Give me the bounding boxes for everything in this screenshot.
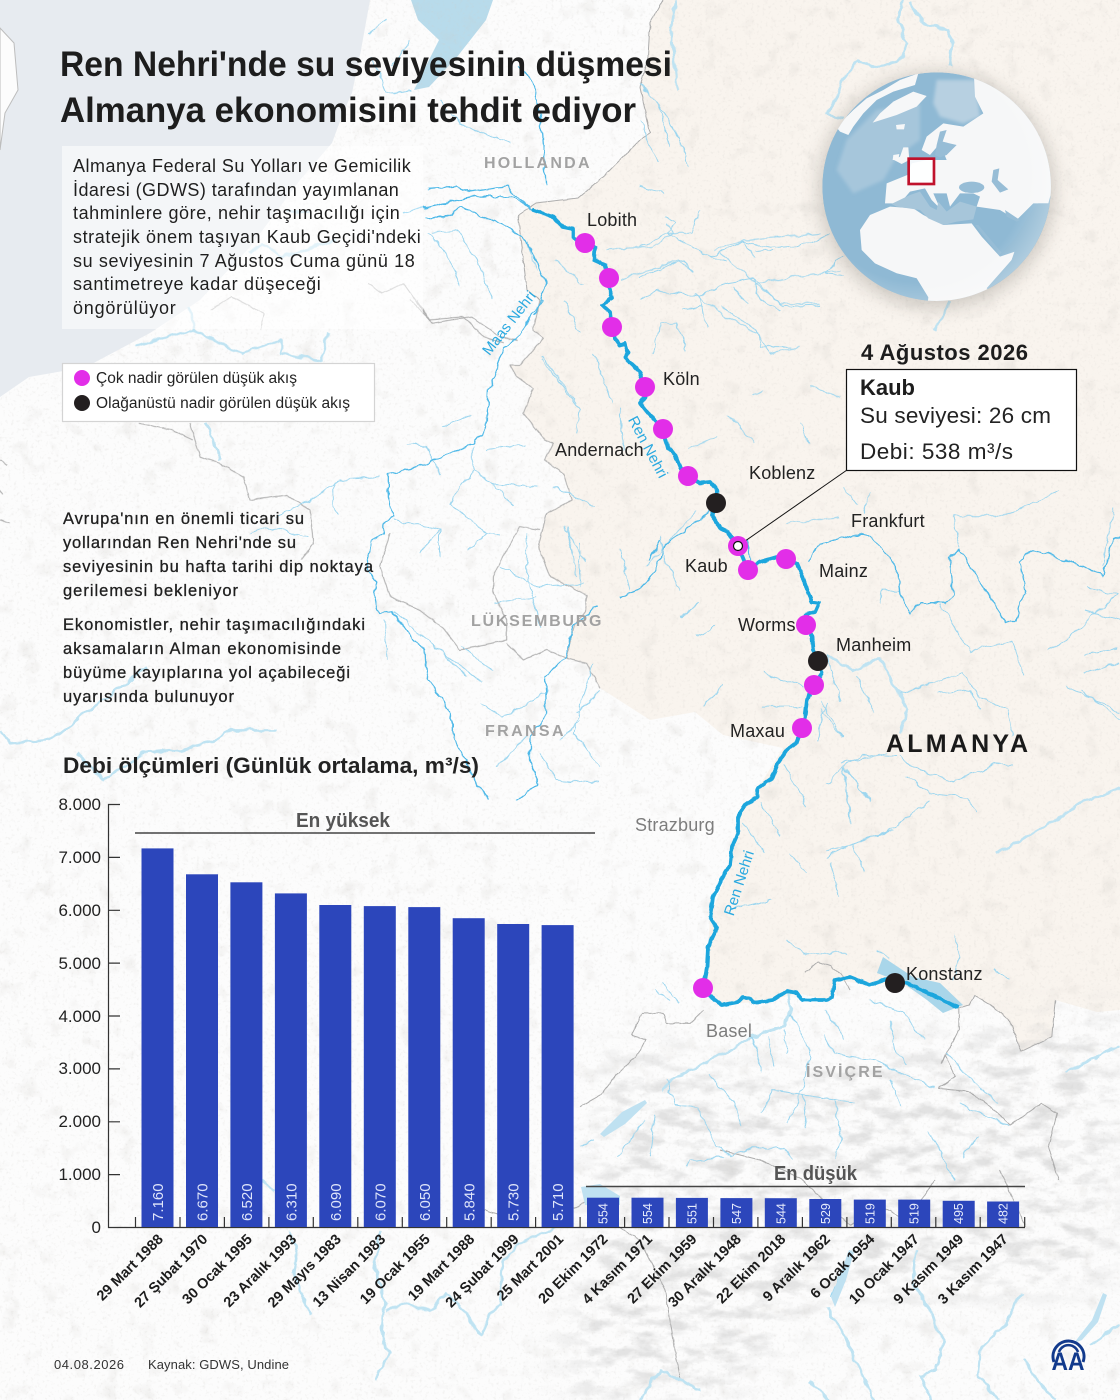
date labels: 27 Ekim 1959	[625, 1232, 700, 1307]
title: Ren Nehri'nde su seviyesinin düşmesi	[60, 45, 672, 84]
highest flow values: 5.710	[550, 1183, 567, 1221]
footer date and source: 04.08.2026	[54, 1357, 124, 1372]
lowest flow values: 519	[863, 1203, 877, 1224]
lakes	[581, 957, 1107, 1343]
river labels: Ren Nehri	[624, 413, 671, 481]
city labels: Konstanz	[906, 964, 983, 984]
city labels: Manheim	[836, 635, 911, 655]
date labels: 30 Ocak 1995	[180, 1232, 256, 1308]
date labels: 30 Aralık 1948	[665, 1232, 745, 1311]
group header: highest: En yüksek	[296, 810, 391, 832]
highest flow values: 6.310	[283, 1183, 300, 1221]
intro text panel: İdaresi (GDWS) tarafından yayımlanan	[73, 180, 399, 200]
city labels: Mainz	[819, 561, 868, 581]
date labels: 9 Kasım 1949	[891, 1232, 967, 1308]
country labels: İSVİÇRE	[806, 1063, 885, 1081]
callout: Kaub: Kaub	[860, 375, 915, 400]
intro text panel: öngörülüyor	[73, 298, 176, 318]
footer date and source	[54, 1357, 289, 1372]
highest flow values: 5.730	[506, 1183, 523, 1221]
lowest flow values: 482	[997, 1203, 1011, 1224]
y axis: 4.000	[58, 1007, 101, 1026]
Britain coast	[0, 28, 18, 150]
date labels: 19 Ocak 1955	[357, 1232, 434, 1308]
measurement stations: rare low flow	[575, 233, 824, 998]
date labels: 29 Mart 1988	[94, 1232, 167, 1304]
country labels: LÜKSEMBURG	[471, 611, 604, 630]
highest flow values: 6.520	[239, 1183, 256, 1221]
legend	[62, 364, 374, 422]
date labels: 25 Mart 2001	[494, 1232, 567, 1304]
city labels: Andernach	[555, 440, 644, 460]
y axis: 5.000	[58, 954, 101, 973]
highest flow values: 6.050	[417, 1183, 434, 1221]
date labels: 22 Ekim 2018	[714, 1232, 789, 1307]
date labels: 20 Ekim 1972	[536, 1232, 611, 1307]
y axis	[58, 795, 1025, 1237]
city labels: Basel	[706, 1021, 752, 1041]
y axis: 8.000	[58, 795, 101, 814]
country labels	[471, 155, 1028, 1081]
lowest flow values	[596, 1203, 1011, 1224]
intro text panel	[62, 146, 423, 329]
legend: Olağanüstü nadir görülen düşük akış	[96, 395, 350, 412]
date labels: 29 Mayıs 1983	[265, 1232, 345, 1311]
group header: lowest: En düşük	[774, 1163, 858, 1185]
highest flow values: 5.840	[461, 1183, 478, 1221]
date labels: 10 Ocak 1947	[846, 1232, 923, 1308]
lowest flow values: 529	[819, 1203, 833, 1224]
lowest flow values: 519	[908, 1203, 922, 1224]
highest flow values	[150, 1183, 567, 1221]
sea	[0, 0, 370, 397]
paragraph two: büyüme kayıplarına yol açabileceği	[63, 664, 350, 682]
highest flow values: 6.670	[194, 1183, 212, 1221]
date labels: 19 Mart 1988	[405, 1232, 478, 1304]
city labels: Lobith	[587, 210, 637, 230]
intro text panel: tahminlere göre, nehir taşımacılığı için	[73, 203, 400, 223]
locator globe	[818, 72, 1060, 313]
river labels	[479, 288, 758, 918]
date labels: 4 Kasım 1971	[580, 1232, 656, 1308]
intro text panel: stratejik önem taşıyan Kaub Geçidi'ndeki	[73, 227, 421, 247]
intro text panel: santimetreye kadar düşeceği	[73, 274, 321, 294]
city labels: Worms	[738, 615, 796, 635]
measurement stations: exceptionally rare low flow	[706, 493, 905, 993]
lowest flow values: 551	[685, 1203, 699, 1224]
bar chart	[58, 795, 1025, 1311]
highest flow bars	[142, 848, 574, 1227]
callout: Kaub: 4 Ağustos 2026	[861, 340, 1028, 365]
title	[60, 45, 672, 130]
IJsselmeer	[411, 0, 493, 90]
date labels: 24 Şubat 1999	[443, 1232, 523, 1311]
date labels: 6 Ocak 1954	[808, 1232, 878, 1302]
stronger rivers: Main, Maas, Mosel, Netherlands branches	[367, 67, 1120, 800]
paragraph one	[63, 510, 374, 600]
y axis: 6.000	[58, 901, 101, 920]
paragraph one: gerilemesi bekleniyor	[63, 582, 238, 600]
Germany land area	[510, 0, 1120, 1052]
paragraph one: Avrupa'nın en önemli ticari su	[63, 510, 304, 528]
y axis: 2.000	[58, 1112, 101, 1131]
lowest flow values: 547	[730, 1203, 744, 1224]
callout: Kaub	[846, 340, 1076, 470]
lowest flow bars	[587, 1198, 1019, 1227]
footer date and source: Kaynak: GDWS, Undine	[148, 1357, 289, 1372]
intro text panel: Almanya Federal Su Yolları ve Gemicilik	[73, 156, 412, 176]
legend: Çok nadir görülen düşük akış	[96, 370, 297, 387]
paragraph two	[63, 616, 365, 706]
country labels: FRANSA	[485, 723, 566, 740]
paragraph two: uyarısında bulunuyor	[63, 688, 234, 706]
date labels: 3 Kasım 1947	[935, 1232, 1012, 1308]
callout: Kaub: Debi: 538 m³/s	[860, 439, 1013, 464]
date labels	[94, 1232, 1012, 1311]
lowest flow values: 544	[774, 1203, 788, 1224]
country labels: HOLLANDA	[484, 155, 592, 172]
city labels: Kaub	[685, 556, 728, 576]
paragraph one: yollarından Ren Nehri'nde su	[63, 534, 296, 552]
chart heading: Debi ölçümleri (Günlük ortalama, m³/s)	[63, 753, 479, 778]
date labels: 9 Aralık 1962	[760, 1232, 834, 1305]
intro text panel: su seviyesinin 7 Ağustos Cuma günü 18	[73, 251, 415, 271]
y axis: 3.000	[58, 1059, 101, 1078]
paragraph two: Ekonomistler, nehir taşımacılığındaki	[63, 616, 365, 634]
y axis: 0	[92, 1218, 101, 1237]
city labels: Koblenz	[749, 463, 815, 483]
callout: Kaub: Su seviyesi: 26 cm	[860, 403, 1051, 428]
city labels: Strazburg	[635, 815, 715, 835]
paragraph two: aksamaların Alman ekonomisinde	[63, 640, 341, 658]
y axis: 1.000	[58, 1165, 101, 1184]
date labels: 27 Şubat 1970	[132, 1232, 211, 1311]
y axis: 7.000	[58, 848, 101, 867]
callout leader line and Kaub marker	[728, 470, 847, 556]
lowest flow values: 554	[641, 1203, 655, 1224]
city labels: Frankfurt	[851, 511, 925, 531]
thin tributaries	[250, 20, 1120, 1297]
river labels: Ren Nehri	[721, 848, 758, 918]
city labels: Köln	[663, 369, 700, 389]
date labels: 13 Nisan 1983	[310, 1232, 389, 1311]
river labels: Maas Nehri	[479, 288, 540, 359]
highest flow values: 6.090	[328, 1183, 345, 1221]
date labels: 23 Aralık 1993	[221, 1232, 300, 1311]
paragraph one: seviyesinin bu hafta tarihi dip noktaya	[63, 558, 374, 576]
river: Rhine	[533, 210, 957, 1007]
lowest flow values: 495	[952, 1203, 966, 1224]
title: Almanya ekonomisini tehdit ediyor	[60, 91, 636, 130]
city labels	[555, 210, 983, 1041]
highest flow values: 6.070	[372, 1183, 389, 1221]
country labels: ALMANYA	[886, 730, 1028, 758]
city labels: Maxau	[730, 721, 785, 741]
lowest flow values: 554	[596, 1203, 610, 1224]
highest flow values: 7.160	[150, 1183, 167, 1221]
logo: AA: AA	[1052, 1348, 1084, 1376]
